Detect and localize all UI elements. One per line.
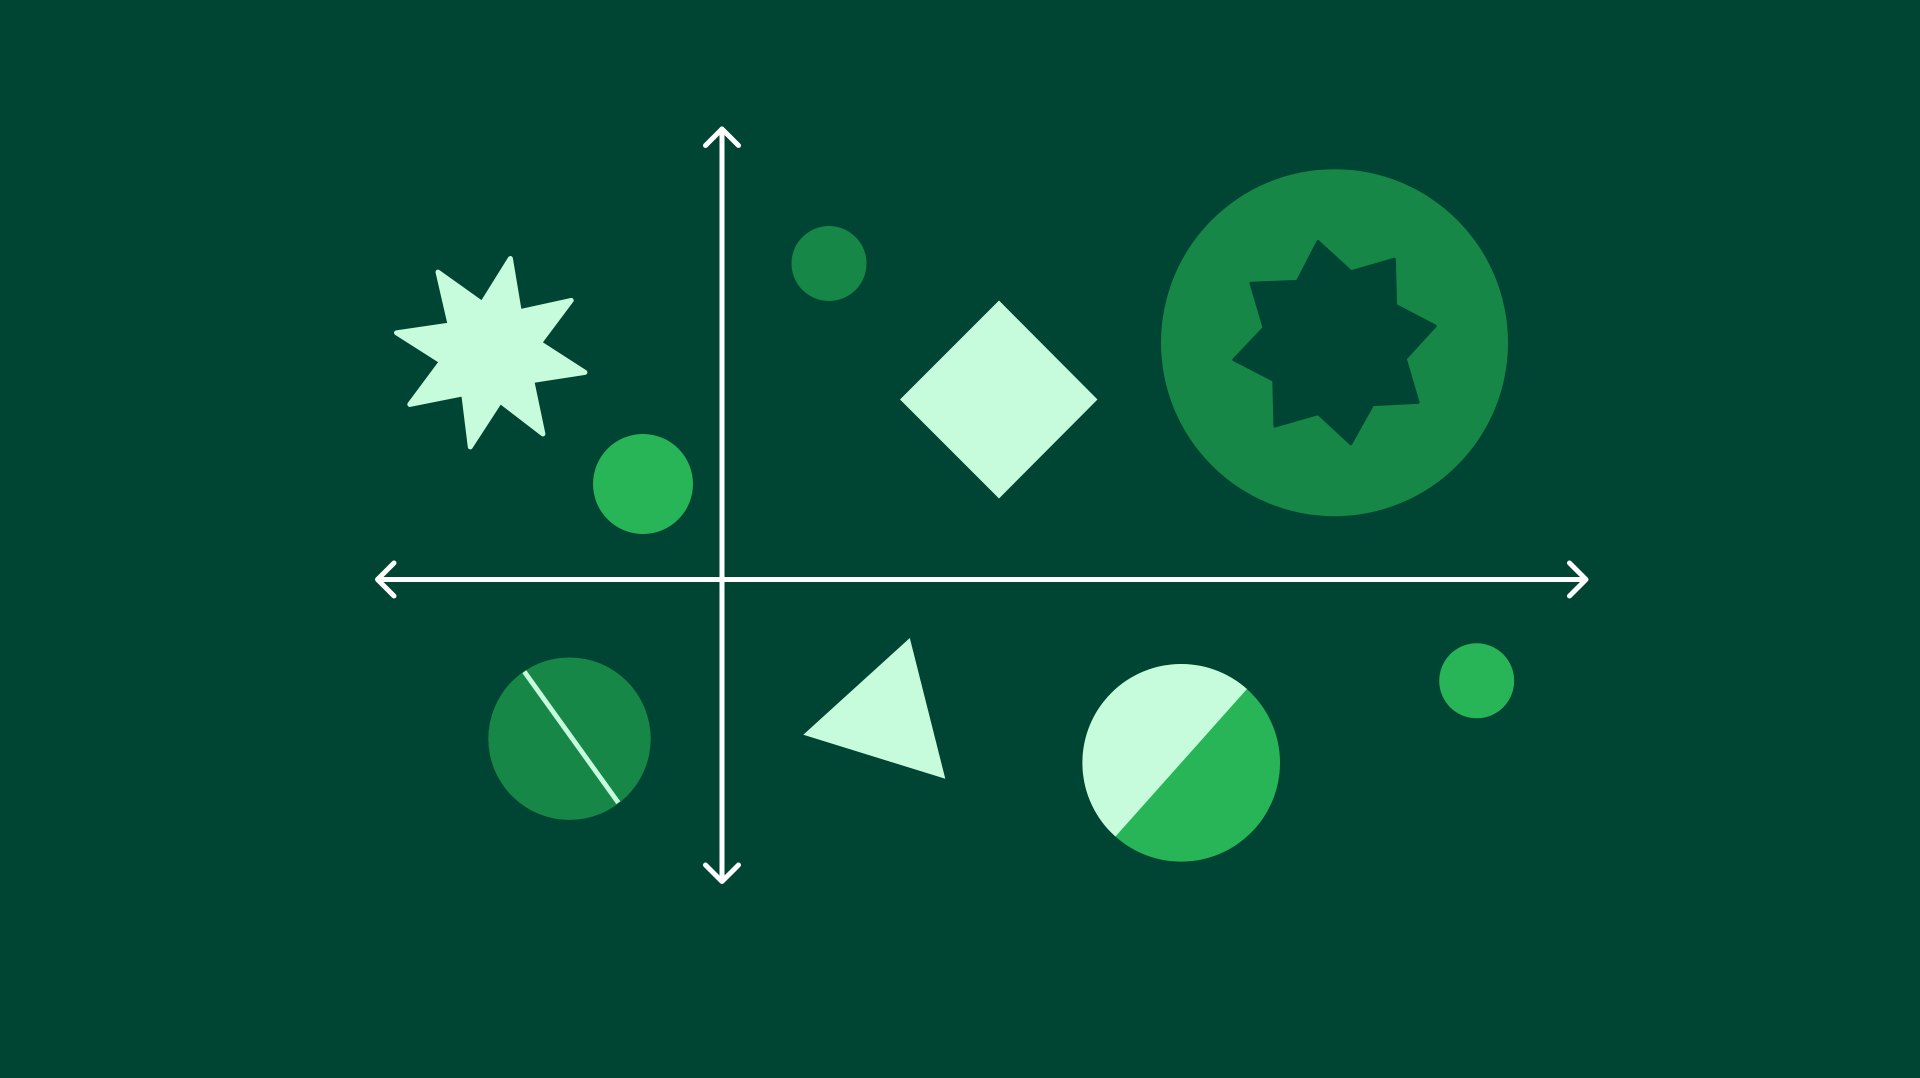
icon: mint diamond [900, 300, 1098, 498]
icon: eight-point mint star [396, 258, 585, 447]
icon: bright green circle, right [1439, 643, 1514, 718]
icon: mint triangle [803, 638, 945, 779]
icon: medium green circle, top [792, 226, 866, 301]
illustration: quadrant chart with shapes [375, 126, 1588, 884]
horizontal axis with arrows [378, 563, 1586, 596]
icon: large green circle with star cutout [1161, 169, 1508, 516]
icon: bright green circle, upper left [593, 434, 693, 534]
icon: two-tone split circle [1082, 664, 1280, 862]
vertical axis with arrows [706, 129, 738, 882]
icon: green circle with mint diagonal line [488, 658, 651, 820]
